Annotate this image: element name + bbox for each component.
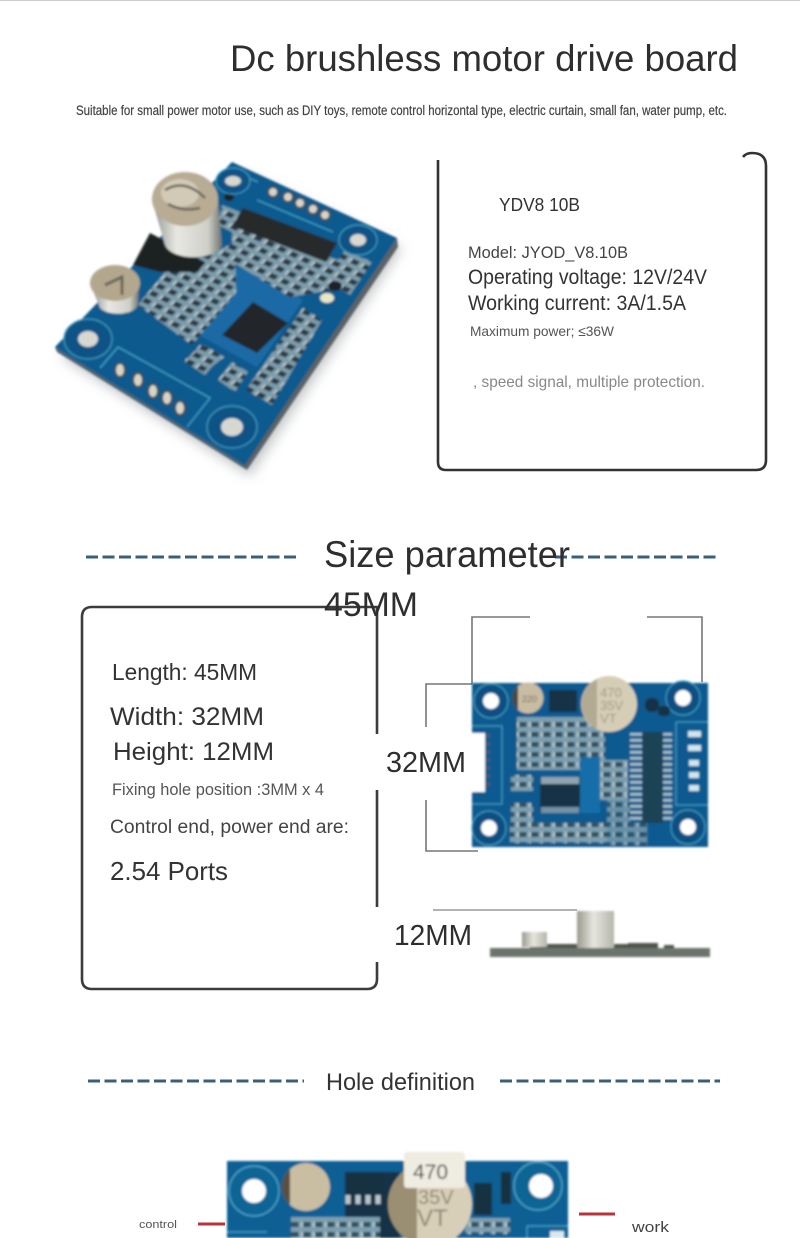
small capacitor [92, 285, 139, 314]
panel frame [438, 153, 766, 470]
divider: hole definition right [500, 1080, 720, 1082]
main chip [222, 302, 288, 353]
panel: specifications [438, 153, 766, 470]
dimension: length: Length: 45MM [112, 659, 257, 685]
title: Dc brushless motor drive board [230, 38, 738, 79]
product photo: hole definition board [227, 1152, 568, 1238]
fixing hole note: Fixing hole position :3MM x 4 [112, 780, 324, 799]
spec: voltage: Operating voltage: 12V/24V [468, 266, 707, 289]
right transistors [474, 1183, 492, 1215]
dark mosfet under capacitor [133, 233, 205, 272]
pointer: control [198, 1222, 225, 1226]
terminal end: power pads [688, 731, 701, 791]
mounting holes [64, 168, 377, 448]
side view height line [433, 909, 577, 911]
resistor grids [517, 717, 605, 770]
panel frame [82, 607, 377, 989]
product photo: top view board [471, 676, 708, 847]
upper chip [232, 208, 337, 262]
heading: hole definition: Hole definition [326, 1069, 475, 1096]
mounting holes [229, 1166, 279, 1216]
product photo: angled driver board [55, 162, 402, 476]
board surface [55, 162, 397, 465]
dimension: width: Width: 32MM [110, 703, 264, 731]
product photo: top view board: 35V [600, 698, 623, 713]
spec: model: Model: JYOD_V8.10B [468, 243, 628, 262]
brighter chip zone [190, 267, 303, 367]
large capacitor [577, 911, 614, 948]
large capacitor [152, 200, 222, 257]
heading: size parameter: Size parameter [324, 534, 570, 575]
label: work: work [631, 1219, 670, 1236]
label: 32MM: 32MM [386, 747, 466, 779]
large capacitor [388, 1162, 472, 1238]
blue chip zone [580, 757, 600, 813]
dark transistors [645, 698, 659, 712]
spec: features: , speed signal, multiple protection. [473, 374, 705, 391]
label: 45MM: 45MM [324, 586, 418, 624]
terminal pads [115, 187, 330, 415]
board surface [472, 683, 708, 847]
product photo: hole definition board: VT [417, 1205, 448, 1232]
top page edge [0, 0, 800, 1]
pcb [490, 948, 710, 957]
mounting holes [472, 681, 705, 845]
port pitch: 2.54 Ports [110, 856, 228, 886]
small capacitor [522, 932, 547, 947]
label: 12MM: 12MM [394, 920, 472, 952]
traces [100, 170, 333, 427]
product photo: hole definition board: 470 [413, 1161, 448, 1184]
resistor grid [291, 1217, 380, 1238]
driver chip [642, 732, 663, 823]
panel: dimensions [82, 607, 377, 989]
board edge [245, 238, 398, 470]
parts on pcb [530, 943, 674, 948]
spec: power: Maximum power; ≤36W [470, 323, 615, 339]
port note: Control end, power end are: [110, 817, 349, 838]
led and small dark parts [320, 293, 334, 303]
divider: size parameter left [86, 556, 300, 558]
divider: hole definition left [88, 1080, 304, 1082]
product photo: top view board: 220 [522, 694, 537, 704]
large capacitor [581, 676, 637, 732]
pads [227, 1226, 568, 1238]
small chip [540, 777, 580, 813]
product photo: top view board: 470 [600, 685, 622, 700]
label: control: control [139, 1219, 177, 1231]
capacitor marking [404, 1152, 465, 1188]
divider: size parameter right [555, 556, 718, 558]
board surface [227, 1161, 568, 1238]
pointer: work [579, 1212, 615, 1216]
spec: current: Working current: 3A/1.5A [468, 292, 686, 315]
resistor grids [138, 243, 236, 345]
spec: board code: YDV8 10B [499, 195, 580, 215]
dark band beside capacitor [345, 1172, 400, 1238]
dark regulator [549, 690, 577, 712]
board shadow [62, 172, 402, 476]
regulator [345, 1172, 383, 1194]
notched connector edge [471, 733, 485, 792]
product photo: side view board [490, 911, 710, 957]
product photo: top view board: VT [600, 711, 617, 726]
small capacitor [512, 682, 544, 714]
small capacitor [282, 1163, 330, 1211]
top view dimension brackets [426, 617, 702, 851]
dimension: height: Height: 12MM [113, 738, 274, 766]
product photo: hole definition board: 35V [418, 1187, 454, 1209]
